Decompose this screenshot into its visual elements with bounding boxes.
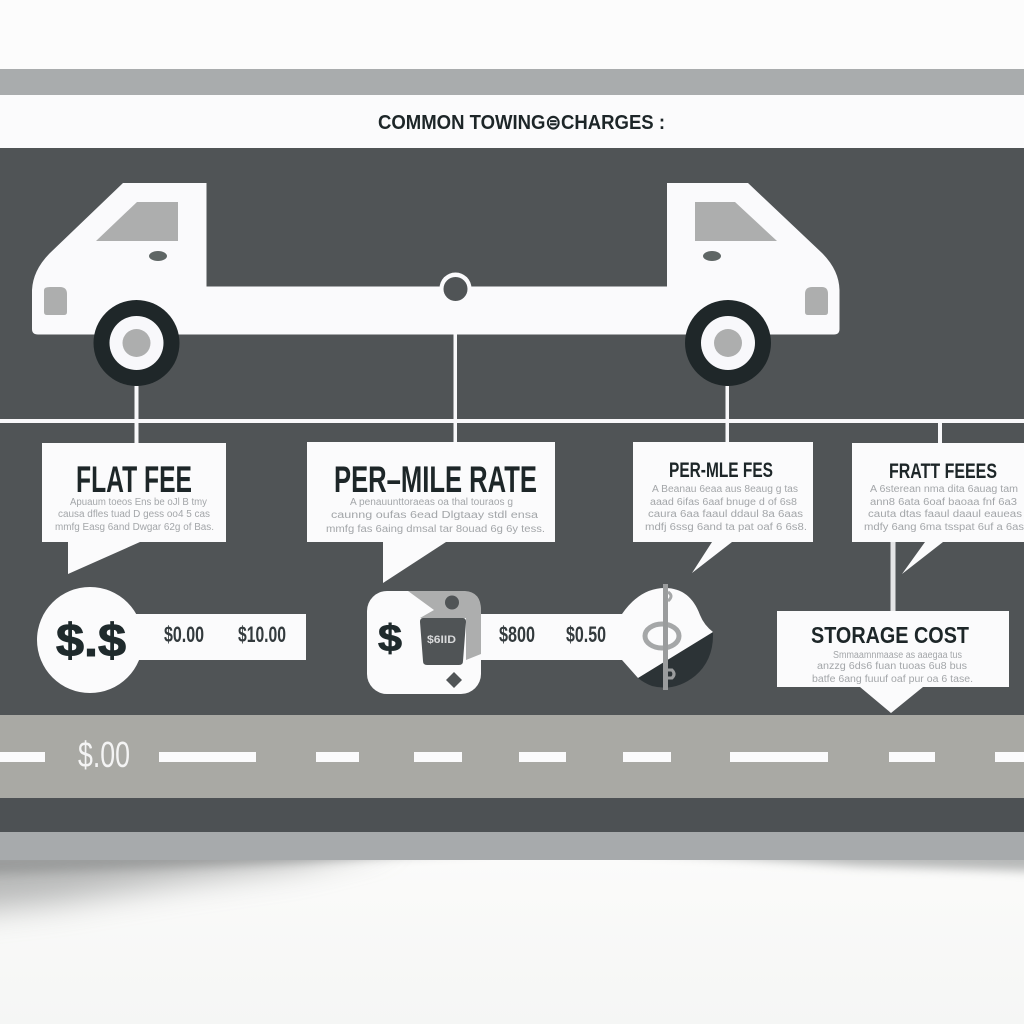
coin circle <box>37 587 143 693</box>
left cab window <box>96 202 178 241</box>
upper hook <box>668 592 671 601</box>
connector lines <box>0 334 1024 612</box>
split coin icon <box>622 584 713 690</box>
high price: $0.50 <box>566 622 606 647</box>
left wheel <box>94 300 180 386</box>
left door handle <box>149 251 167 261</box>
heading: PER-MLE FES <box>669 459 773 482</box>
description: mdfy 6ang 6ma tsspat 6uf a 6as <box>864 522 1024 533</box>
title bar <box>0 95 1024 148</box>
road price label: $.00 <box>78 734 130 775</box>
truck body <box>32 183 840 334</box>
heading: FLAT FEE <box>76 459 192 500</box>
road band <box>0 715 1024 798</box>
callout: per-mile fees <box>633 442 813 573</box>
dark lower half <box>638 632 713 688</box>
description: mdfj 6ssg 6and ta pat oaf 6 6s8. <box>645 522 807 533</box>
tag hole <box>445 596 459 610</box>
right cab window <box>695 202 777 241</box>
left headlight <box>44 287 67 315</box>
description: anzzg 6ds6 fuan tuoas 6u8 bus <box>817 661 967 672</box>
bottom grey band <box>0 832 1024 860</box>
grey coin ring <box>645 624 679 648</box>
dollar symbols: $.$ <box>56 614 126 666</box>
description: cauta dtas faaul daaul eaueas <box>868 509 1022 520</box>
price bag <box>420 618 466 665</box>
title: COMMON TOWING⊜CHARGES : <box>378 112 665 134</box>
tow hitch ring <box>440 272 472 304</box>
callout: flat fee <box>42 443 226 574</box>
description <box>864 484 1024 533</box>
heading: PER–MILE RATE <box>334 459 537 500</box>
floor and shadow beneath the card <box>0 860 1024 934</box>
lower dark strip <box>0 798 1024 832</box>
description: batfe 6ang fuuuf oaf pur oa 6 tase. <box>812 674 973 685</box>
description <box>326 497 545 535</box>
tow truck illustration <box>32 183 840 386</box>
right wheel <box>685 300 771 386</box>
right door handle <box>703 251 721 261</box>
description: caura 6aa faaul ddaul 8a 6aas <box>648 509 803 520</box>
right headlight <box>805 287 828 315</box>
description <box>812 650 973 685</box>
dollar symbol: $ <box>378 618 402 660</box>
high price: $10.00 <box>238 622 286 647</box>
description: A penauunttoraeas oa thal touraos g <box>350 497 513 508</box>
bag label: $6IID <box>427 634 456 646</box>
description: Apuaum toeos Ens be oJl B tmy <box>70 497 207 508</box>
callout: flat fees <box>852 443 1024 574</box>
description: aaad 6ifas 6aaf bnuge d of 6s8 <box>650 497 797 508</box>
dark main panel <box>0 148 1024 715</box>
description: causa dfles tuad D gess oo4 5 cas <box>58 509 210 520</box>
price tag: flat fee <box>37 587 306 693</box>
description <box>55 497 214 533</box>
description: ann8 6ata 6oaf baoaa fnf 6a3 <box>870 497 1017 508</box>
description: Smmaamnmaase as aaegaa tus <box>833 650 962 661</box>
description <box>645 484 807 533</box>
white upper half <box>622 588 713 678</box>
price bar <box>478 614 628 660</box>
heading: STORAGE COST <box>811 622 969 648</box>
description: mmfg fas 6aing dmsal tar 8ouad 6g 6y tess. <box>326 524 545 535</box>
callout: per-mile rate <box>307 442 555 583</box>
callout: storage cost <box>777 611 1009 713</box>
diamond mark <box>446 672 462 688</box>
low price: $800 <box>499 622 535 647</box>
description: A 6sterean nma dita 6auag tam <box>870 484 1018 495</box>
lower hook <box>668 670 674 678</box>
grey tag flap <box>408 591 481 660</box>
top grey band <box>0 69 1024 95</box>
description: caunng oufas 6ead Dlgtaay stdl ensa <box>331 510 539 521</box>
grey vertical bar <box>663 584 668 690</box>
description: A Beanau 6eaa aus 8eaug g tas <box>652 484 798 495</box>
price bar <box>125 614 306 660</box>
low price: $0.00 <box>164 622 204 647</box>
description: mmfg Easg 6and Dwgar 62g of Bas. <box>55 522 214 533</box>
icon tile <box>367 591 481 694</box>
price tag: per-mile rate <box>367 591 628 694</box>
lane dashes <box>0 752 1024 762</box>
